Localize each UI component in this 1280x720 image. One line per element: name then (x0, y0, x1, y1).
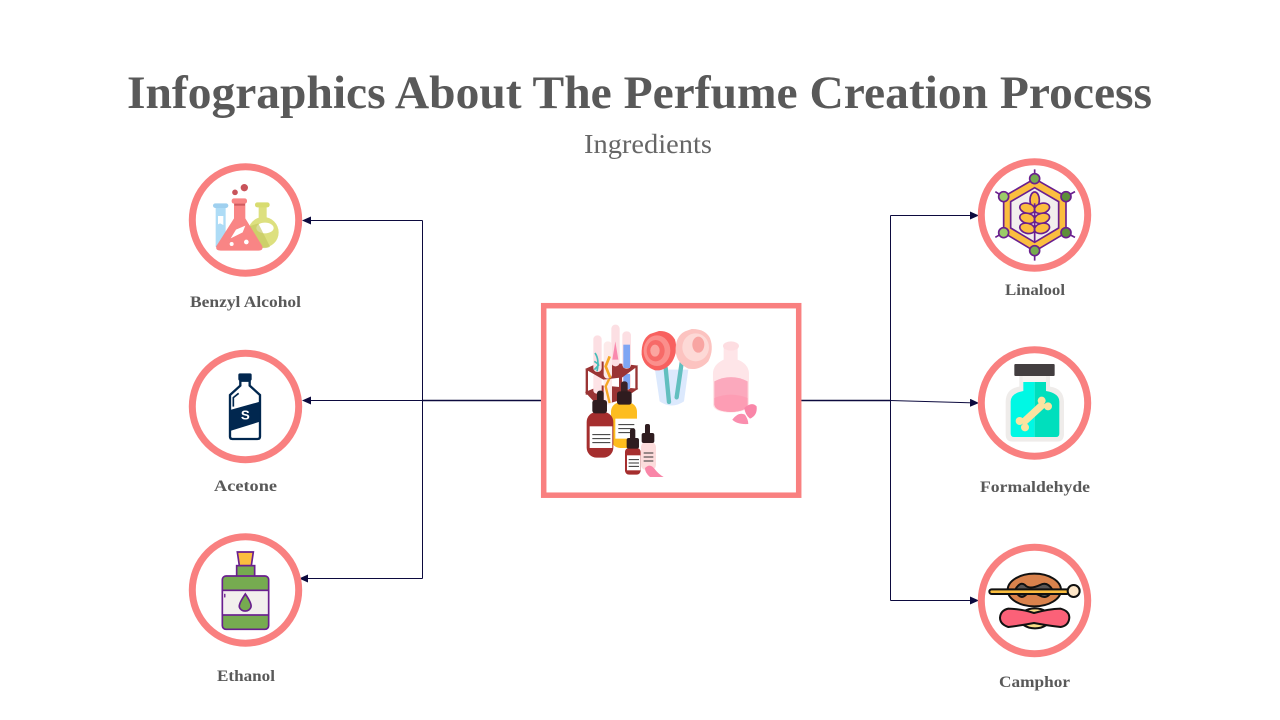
title: Infographics About The Perfume Creation Process (127, 67, 1152, 119)
icon: lab flasks (213, 184, 279, 251)
light small bottle (641, 442, 656, 470)
central panel: perfume ingredients illustration (544, 306, 799, 495)
item: Camphor (981, 547, 1088, 691)
icon: solvent bottle: S (241, 408, 250, 423)
label: Linalool (1005, 282, 1066, 299)
subtitle: Ingredients (584, 129, 712, 159)
small petal (645, 466, 664, 477)
roses (642, 331, 676, 370)
rack top plate (585, 361, 638, 380)
item: Benzyl Alcohol (190, 167, 302, 311)
yellow bottle (611, 402, 637, 448)
label: Camphor (999, 674, 1070, 691)
icon: green bottle (222, 552, 269, 629)
vase (655, 370, 688, 405)
rack bottom plate and posts (585, 366, 638, 406)
item: Formaldehyde (980, 350, 1090, 496)
upper tube parts (593, 325, 631, 379)
label: Benzyl Alcohol (190, 294, 302, 311)
icon: camphor (989, 574, 1080, 628)
label: Formaldehyde (980, 479, 1090, 496)
item: Acetone (192, 353, 299, 495)
icon: solvent bottle (230, 373, 260, 439)
dark red bottle (587, 412, 613, 458)
pink bottle (713, 346, 749, 413)
item: Ethanol (192, 537, 299, 685)
item: Linalool (981, 162, 1088, 299)
lower tube parts (593, 373, 631, 405)
connector: center to left items (300, 220, 542, 578)
icon: jar with bone (1006, 364, 1064, 442)
petals (744, 404, 757, 419)
connector: center to right items (801, 216, 978, 600)
icon: molecule with wheat (995, 169, 1075, 261)
label: Ethanol (217, 668, 276, 685)
label: Acetone (214, 478, 277, 495)
small red bottle (625, 448, 641, 475)
